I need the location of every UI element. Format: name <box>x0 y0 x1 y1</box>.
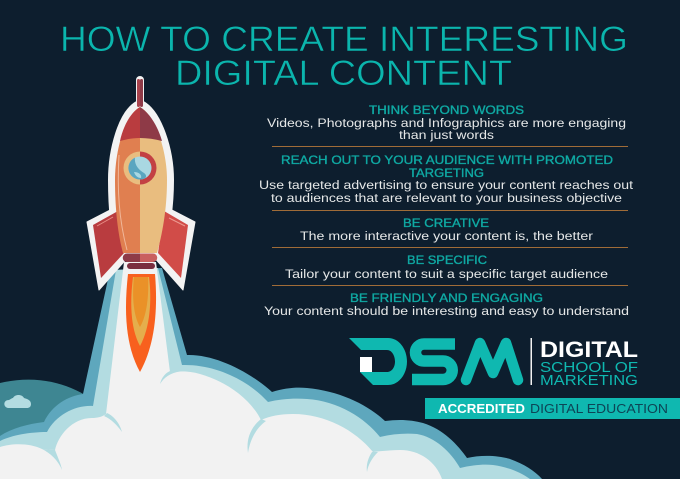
tip: be specific <box>285 253 608 281</box>
logo wordmark <box>540 337 638 389</box>
rocket <box>87 76 195 290</box>
logo wordmark: MARKETING <box>540 372 638 389</box>
left fin <box>93 211 124 278</box>
logo letter D <box>349 338 407 385</box>
tip: promoted targeting <box>259 153 634 205</box>
accredited banner <box>425 398 680 419</box>
logo letter S <box>412 344 455 380</box>
tip: be friendly and engaging <box>264 291 629 318</box>
tip: promoted targeting: to audiences that are relevant to your business objective <box>271 191 622 205</box>
flame <box>126 274 156 372</box>
tip: think beyond words: than just words <box>399 128 494 142</box>
logo letter M <box>466 343 518 380</box>
body highlight <box>97 155 185 250</box>
accredited banner: ACCREDITED <box>438 401 525 416</box>
tip: be friendly and engaging: Your content should be interesting and easy to understand <box>264 304 629 318</box>
title <box>60 20 628 93</box>
title: DIGITAL CONTENT <box>175 54 512 93</box>
accredited banner: DIGITAL EDUCATION <box>530 401 668 416</box>
porthole window <box>124 152 157 184</box>
engine rings <box>123 254 157 269</box>
rocket nose <box>120 107 162 141</box>
hill with small cloud <box>0 380 85 450</box>
rocket body <box>115 107 167 253</box>
tip: think beyond words: Videos, Photographs and Infographics are more engaging <box>267 116 626 130</box>
exhaust beam and cloud: light layer <box>0 268 530 479</box>
tip: be creative <box>300 216 593 243</box>
tip: promoted targeting: Use targeted advertising to ensure your content reaches out <box>259 178 634 192</box>
antenna <box>137 79 143 107</box>
tips text block <box>259 103 634 318</box>
logo wordmark: SCHOOL OF <box>540 359 638 376</box>
tip: be specific: BE SPECIFIC <box>407 253 487 267</box>
tip: promoted targeting: TARGETING <box>409 166 484 180</box>
rocket white outline <box>87 76 195 290</box>
logo wordmark: DIGITAL <box>540 337 638 362</box>
exhaust beam and cloud: white core <box>0 262 442 479</box>
tip: be specific: Tailor your content to suit a specific target audience <box>285 267 608 281</box>
tip: think beyond words: THINK BEYOND WORDS <box>369 103 524 117</box>
tip: think beyond words <box>267 103 626 142</box>
exhaust beam and cloud: outer layer <box>0 268 542 479</box>
tip: be creative: BE CREATIVE <box>403 216 489 230</box>
tip: be creative: The more interactive your content is, the better <box>300 229 593 243</box>
right fin <box>158 211 188 278</box>
tip: be friendly and engaging: BE FRIENDLY AND ENGAGING <box>350 291 543 305</box>
DSM logo <box>349 337 638 389</box>
tip: promoted targeting: REACH OUT TO YOUR AUDIENCE WITH PROMOTED <box>281 153 613 167</box>
title: HOW TO CREATE INTERESTING <box>60 20 628 59</box>
